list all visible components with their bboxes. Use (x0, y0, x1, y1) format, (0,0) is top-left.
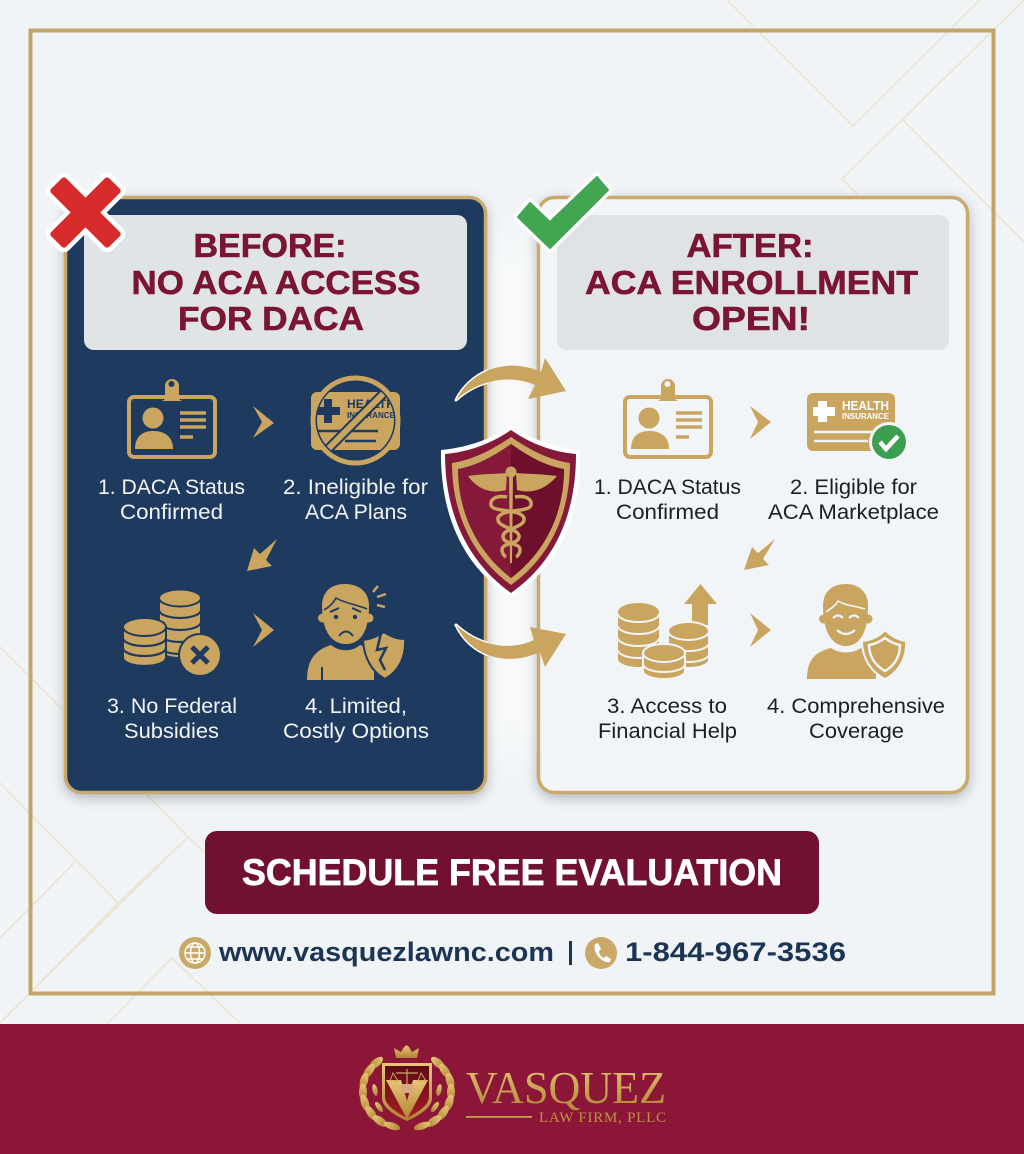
after heading: AFTER: (686, 227, 814, 264)
label: step 1 (98, 476, 245, 524)
label: step 1: 1. DACA Status (98, 476, 245, 499)
icon: coins with up arrow (618, 584, 717, 679)
logo laurel right (413, 1054, 456, 1132)
icon: coins with x (123, 590, 221, 676)
label: step 3: 3. No Federal (107, 695, 237, 718)
contact row (179, 937, 846, 969)
icon: ID badge (625, 379, 711, 457)
label: step 4: 4. Comprehensive (767, 695, 945, 718)
after heading: OPEN! (692, 300, 810, 337)
before heading: NO ACA ACCESS (132, 264, 420, 301)
label: step 2: ACA Plans (305, 501, 407, 524)
before panel background (66, 198, 486, 792)
after heading: ACA ENROLLMENT (585, 264, 918, 301)
icon: health insurance approved: HEALTH (842, 399, 889, 413)
arrow: lower curved (456, 625, 566, 667)
label: step 3 (107, 695, 237, 743)
icon: health insurance approved: INSURANCE (842, 412, 890, 421)
website: www.vasquezlawnc.com (218, 937, 554, 967)
icon: ID badge (129, 379, 215, 457)
label: step 1: Confirmed (616, 501, 719, 524)
arrow: step 2 to 3 (744, 539, 775, 570)
before heading (84, 215, 467, 350)
label: step 2: 2. Eligible for (790, 476, 917, 499)
icon: health insurance approved (807, 393, 909, 462)
label: step 4: Coverage (809, 720, 904, 743)
logo wordmark: VASQUEZ (466, 1062, 666, 1113)
icon: phone (585, 937, 617, 969)
arrow: step 2 to 3 (247, 539, 277, 571)
label: step 4 (283, 695, 429, 743)
label: step 1: Confirmed (120, 501, 223, 524)
label: step 2: 2. Ineligible for (283, 476, 428, 499)
label: step 3: Financial Help (598, 720, 737, 743)
logo (358, 1045, 666, 1132)
icon: globe (179, 937, 211, 969)
panel: after (538, 198, 968, 792)
label: step 4: Costly Options (283, 720, 429, 743)
before heading: BEFORE: (194, 227, 346, 264)
arrow: step 1 to 2 (750, 406, 771, 439)
logo laurel left (358, 1054, 401, 1132)
separator (569, 941, 572, 965)
after panel background (538, 198, 968, 792)
label: step 2 (283, 476, 428, 524)
arrow: step 1 to 2 (253, 406, 274, 438)
label: step 3 (598, 695, 737, 743)
label: step 2: ACA Marketplace (768, 501, 939, 524)
logo crown (394, 1045, 419, 1058)
icon: medical shield (441, 426, 580, 597)
icon: health insurance prohibited: INSURANCE (347, 410, 395, 420)
icon: health insurance prohibited (311, 378, 400, 463)
label: step 4 (767, 695, 945, 743)
icon: green check (518, 177, 608, 248)
label: step 1 (594, 476, 741, 524)
logo rule (466, 1116, 532, 1118)
icon: health insurance prohibited: HEALTH (347, 399, 395, 411)
logo subtitle: LAW FIRM, PLLC (539, 1110, 666, 1126)
outer gold frame (30, 30, 994, 994)
icon: happy person with shield (807, 584, 906, 679)
arrow: upper curved (456, 358, 566, 400)
after heading (557, 215, 949, 350)
label: step 2 (768, 476, 939, 524)
icon: worried person with broken shield (307, 584, 405, 680)
arrow: step 3 to 4 (750, 613, 771, 647)
label: step 3: 3. Access to (607, 695, 727, 718)
call to action button: SCHEDULE FREE EVALUATION (242, 852, 782, 893)
label: step 4: 4. Limited, (305, 695, 407, 718)
arrow: step 3 to 4 (253, 613, 274, 647)
icon: red x (28, 155, 143, 270)
logo shield (382, 1063, 432, 1121)
before heading: FOR DACA (178, 300, 364, 337)
call to action button (205, 831, 819, 914)
footer band (0, 1024, 1024, 1154)
label: step 3: Subsidies (124, 720, 219, 743)
label: step 1: 1. DACA Status (594, 476, 741, 499)
caduceus (468, 466, 557, 563)
phone number: 1-844-967-3536 (625, 937, 846, 967)
panel: before (66, 198, 486, 792)
